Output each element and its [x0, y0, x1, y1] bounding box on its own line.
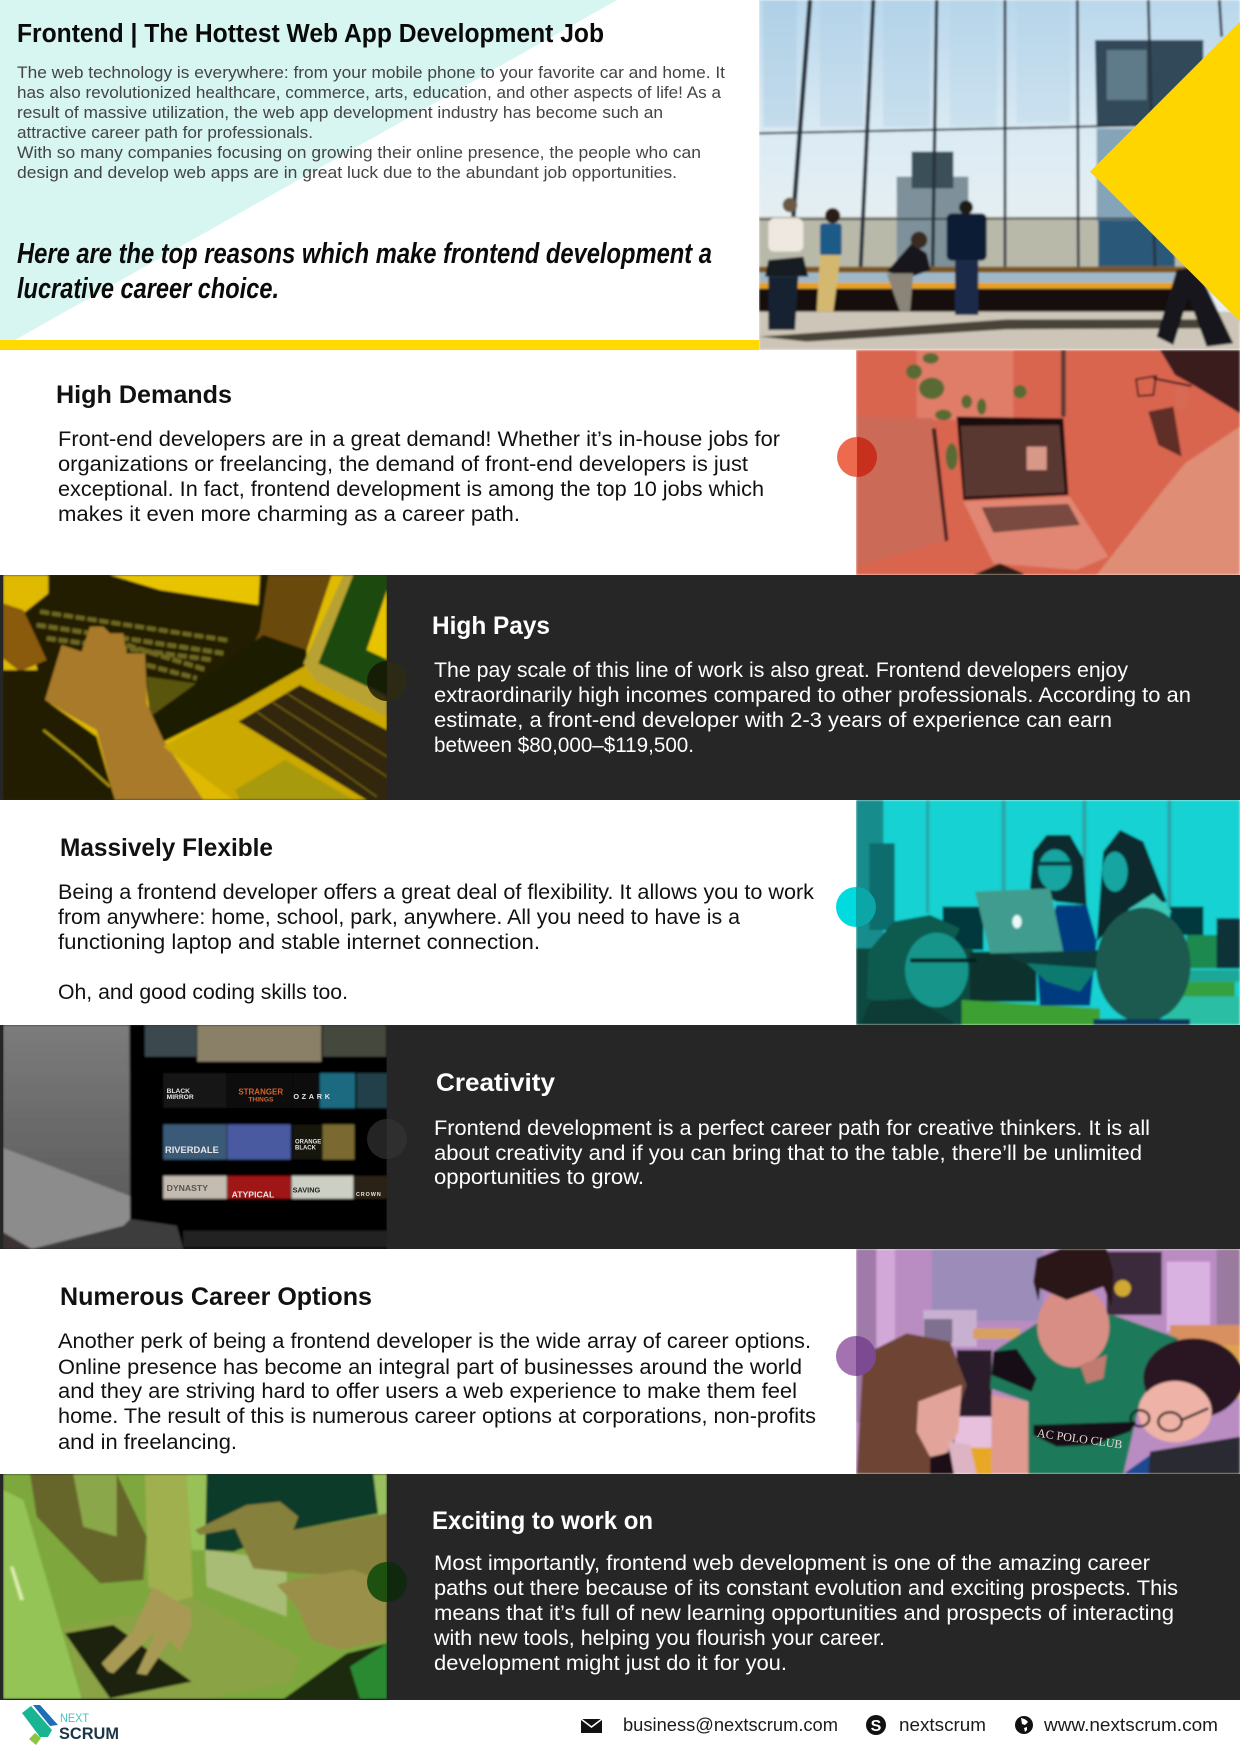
- italic lead-in statement: lucrative career choice.: [17, 273, 279, 305]
- photo: streaming catalogue on laptop, greyscale: OZARK: [293, 1092, 333, 1101]
- photo: streaming catalogue on laptop, greyscale: BLACK: [167, 1088, 190, 1095]
- body text: Most importantly, frontend web development is one of the amazing career: [434, 1552, 1150, 1575]
- body text: Oh, and good coding skills too.: [58, 981, 348, 1004]
- logo: NextScrum: [22, 1705, 119, 1745]
- photo: mentor with two colleagues, purple tint: [856, 1249, 1240, 1474]
- intro paragraph: has also revolutionized healthcare, commerce, arts, education, and other aspects of life! As a: [17, 84, 722, 102]
- panel: Massively Flexible: [58, 800, 1240, 1025]
- dark background: [0, 575, 1240, 800]
- photo: streaming catalogue on laptop, greyscale: BLACK: [295, 1145, 317, 1151]
- photo: hands on laptop, green tint: [3, 1474, 387, 1699]
- body text: Frontend development is a perfect career path for creative thinkers. It is all: [434, 1117, 1150, 1140]
- body text: and they are striving hard to offer users a web experience to make them feel: [58, 1380, 797, 1403]
- body text: makes it even more charming as a career path.: [58, 503, 520, 526]
- body text: Online presence has become an integral part of businesses around the world: [58, 1356, 802, 1379]
- intro paragraph: attractive career path for professionals.: [17, 124, 313, 142]
- dark background: [0, 1474, 1240, 1700]
- body text: from anywhere: home, school, park, anywhere. All you need to have is a: [58, 906, 740, 929]
- photo: streaming catalogue on laptop, greyscale: RIVERDALE: [165, 1145, 219, 1155]
- heading: High Demands: [56, 381, 232, 409]
- body text: [58, 1330, 816, 1454]
- body text: and in freelancing.: [58, 1431, 237, 1454]
- body text: Another perk of being a frontend developer is the wide array of career options.: [58, 1330, 811, 1353]
- panel: High Demands: [56, 350, 1240, 575]
- body text: about creativity and if you can bring that to the table, there’ll be unlimited: [434, 1142, 1142, 1165]
- intro paragraph: The web technology is everywhere: from your mobile phone to your favorite car and home. It: [17, 64, 725, 82]
- body text: [58, 881, 815, 1004]
- body text: means that it’s full of new learning opportunities and prospects of interacting: [434, 1602, 1174, 1625]
- title: Frontend | The Hottest Web App Development Job: [17, 20, 604, 48]
- photo: streaming catalogue on laptop, greyscale: [3, 1025, 387, 1249]
- yellow divider bar: [0, 340, 759, 350]
- logo: NextScrum: NEXT: [60, 1711, 90, 1725]
- body text: with new tools, helping you flourish your career.: [433, 1627, 885, 1650]
- photo: streaming catalogue on laptop, greyscale: ORANGE: [295, 1139, 321, 1145]
- panel: Numerous Career Options: [58, 1249, 1240, 1474]
- body text: home. The result of this is numerous career options at corporations, non-profits: [58, 1405, 816, 1428]
- photo: colleagues around laptop, teal tint: [856, 800, 1240, 1025]
- contact: skype: nextscrum: [899, 1715, 986, 1735]
- panel: Creativity: [0, 1025, 1240, 1249]
- body text: [434, 659, 1191, 757]
- body text: Front-end developers are in a great demand! Whether it’s in-house jobs for: [58, 428, 780, 451]
- body text: extraordinarily high incomes compared to other professionals. According to an: [434, 684, 1191, 707]
- shirt lettering: AC POLO CLUB: [1036, 1426, 1123, 1452]
- footer: [22, 1705, 1218, 1745]
- icon: skype: S: [871, 1718, 882, 1735]
- dot: purple half circle marker: [836, 1336, 876, 1376]
- photo: people at skyscraper window: [759, 0, 1240, 350]
- icon: skype: [866, 1715, 886, 1735]
- heading: Numerous Career Options: [60, 1283, 372, 1311]
- intro paragraph: [17, 64, 725, 182]
- italic lead-in statement: [17, 238, 712, 305]
- icon: globe: [1015, 1716, 1033, 1734]
- body text: The pay scale of this line of work is also great. Frontend developers enjoy: [434, 659, 1129, 682]
- photo: streaming catalogue on laptop, greyscale: CROWN: [356, 1192, 382, 1198]
- photo: streaming catalogue on laptop, greyscale: ATYPICAL: [232, 1190, 274, 1200]
- body text: [58, 428, 780, 526]
- contact: email: business@nextscrum.com: [623, 1715, 838, 1735]
- intro paragraph: With so many companies focusing on growing their online presence, the people who can: [17, 144, 701, 162]
- icon: envelope: [581, 1719, 602, 1733]
- photo: streaming catalogue on laptop, greyscale: MIRROR: [167, 1094, 194, 1101]
- photo: developer at laptop, red tint: [856, 350, 1240, 575]
- photo: streaming catalogue on laptop, greyscale: STRANGER: [238, 1088, 283, 1097]
- dot: red half circle marker: [837, 437, 877, 477]
- contact: website: www.nextscrum.com: [1043, 1715, 1218, 1735]
- panel: header introduction: [0, 0, 1240, 350]
- heading: Exciting to work on: [432, 1507, 653, 1535]
- dot: cyan half circle marker: [836, 887, 876, 927]
- teal diagonal background: [0, 0, 617, 340]
- body text: functioning laptop and stable internet connection.: [58, 931, 540, 954]
- body text: development might just do it for you.: [434, 1652, 787, 1675]
- photo: streaming catalogue on laptop, greyscale: DYNASTY: [167, 1183, 208, 1193]
- body text: paths out there because of its constant evolution and exciting prospects. This: [434, 1577, 1178, 1600]
- italic lead-in statement: Here are the top reasons which make frontend development a: [17, 238, 712, 270]
- photo: hands on laptops, yellow tint: [3, 575, 387, 800]
- intro paragraph: result of massive utilization, the web app development industry has become such an: [17, 104, 663, 122]
- panel: Exciting to work on: [0, 1474, 1240, 1700]
- body text: Being a frontend developer offers a great deal of flexibility. It allows you to work: [58, 881, 815, 904]
- heading: Massively Flexible: [60, 834, 273, 862]
- body text: between $80,000–$119,500.: [434, 734, 694, 757]
- body text: [434, 1117, 1150, 1189]
- photo: streaming catalogue on laptop, greyscale: SAVING: [293, 1186, 320, 1195]
- intro paragraph: design and develop web apps are in great luck due to the abundant job opportunities.: [17, 164, 677, 182]
- logo: NextScrum: SCRUM: [59, 1724, 119, 1743]
- dot: dark half circle marker: [367, 1119, 407, 1159]
- body text: organizations or freelancing, the demand of front-end developers is just: [58, 453, 748, 476]
- body text: estimate, a front-end developer with 2-3 years of experience can earn: [434, 709, 1112, 732]
- photo: streaming catalogue on laptop, greyscale: THINGS: [248, 1096, 274, 1103]
- dot: dark green half circle marker: [367, 1562, 407, 1602]
- panel: High Pays: [0, 575, 1240, 800]
- body text: opportunities to grow.: [434, 1166, 644, 1189]
- yellow triangle accent: [1090, 22, 1240, 322]
- heading: High Pays: [432, 612, 550, 640]
- body text: [433, 1552, 1178, 1675]
- dot: dark half circle marker: [367, 661, 407, 701]
- dark background: [0, 1025, 1240, 1249]
- body text: exceptional. In fact, frontend development is among the top 10 jobs which: [58, 478, 764, 501]
- heading: Creativity: [436, 1069, 555, 1097]
